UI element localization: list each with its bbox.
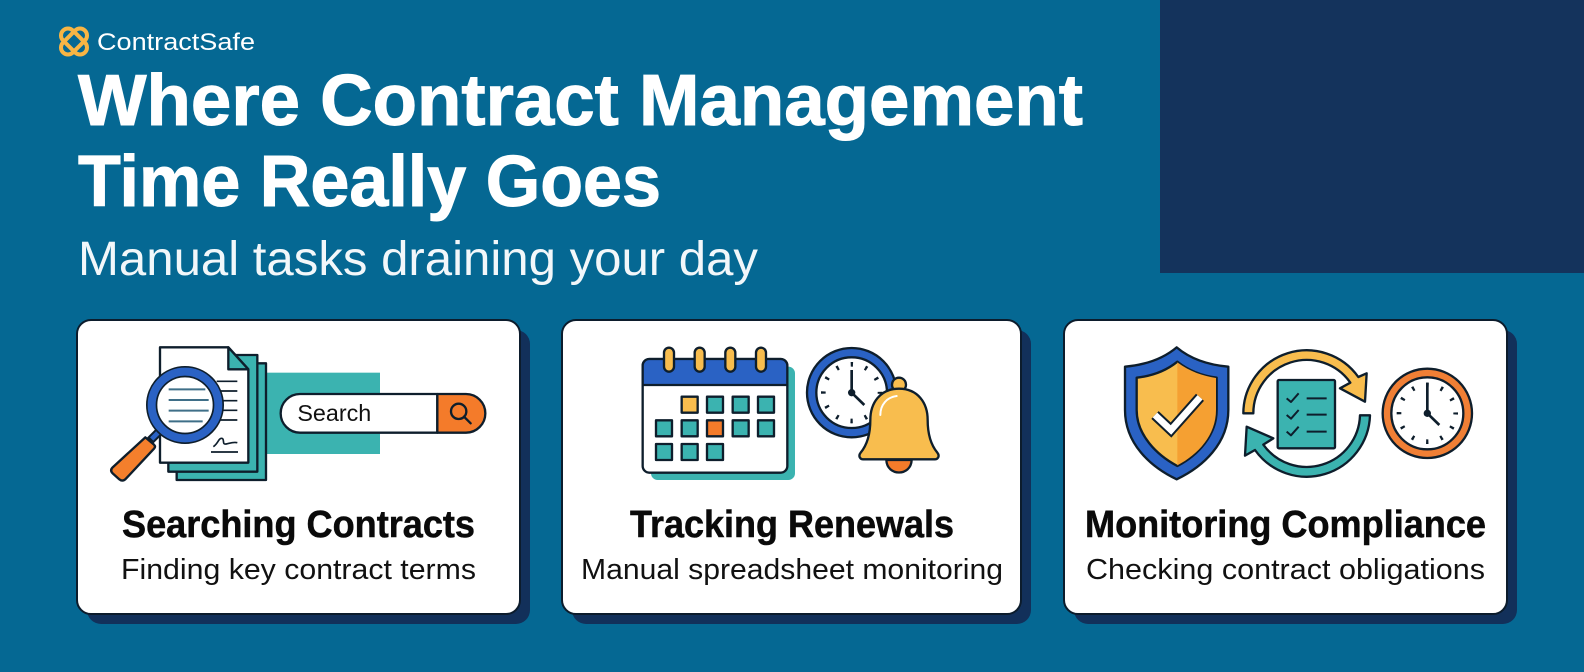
icon: shield, cycle and clock <box>1125 347 1472 479</box>
logo <box>58 26 255 57</box>
subtitle: Manual tasks draining your day <box>78 233 758 286</box>
icon: logo mark <box>58 26 90 57</box>
dark corner panel <box>1160 0 1584 273</box>
card heading: Tracking Renewals <box>630 504 954 546</box>
icon: documents and search bar: Search <box>297 400 371 426</box>
card description: Checking contract obligations <box>1086 554 1485 586</box>
card shadow <box>1074 330 1517 624</box>
title: Time Really Goes <box>78 142 661 222</box>
logo wordmark: ContractSafe <box>97 29 255 56</box>
panel: searching contracts <box>77 320 530 624</box>
card <box>77 320 520 614</box>
panel: tracking renewals <box>562 320 1031 624</box>
card shadow <box>572 330 1031 624</box>
panel: monitoring compliance <box>1064 320 1517 624</box>
card <box>562 320 1021 614</box>
card heading: Searching Contracts <box>122 504 475 546</box>
card heading: Monitoring Compliance <box>1085 504 1486 546</box>
card <box>1064 320 1507 614</box>
title: Where Contract Management <box>78 61 1083 141</box>
title <box>78 61 1083 222</box>
icon: documents and search bar <box>111 347 485 481</box>
card shadow <box>87 330 530 624</box>
card description: Finding key contract terms <box>121 554 476 586</box>
card description: Manual spreadsheet monitoring <box>581 554 1003 586</box>
icon: calendar, clock and bell <box>643 348 939 480</box>
